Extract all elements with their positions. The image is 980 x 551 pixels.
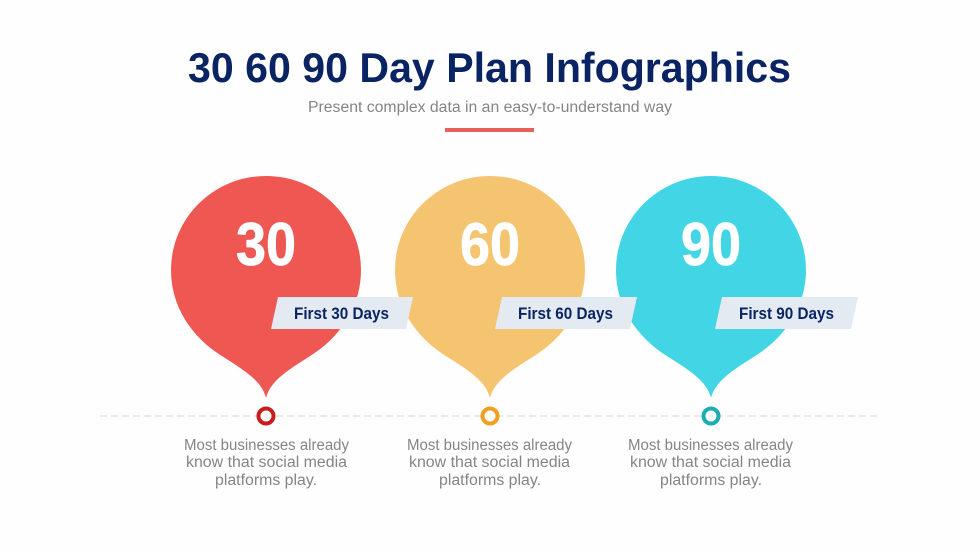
description: 30: know that social media bbox=[186, 454, 347, 471]
title underline bbox=[445, 128, 534, 132]
label: First 30 Days: First 30 Days bbox=[294, 304, 389, 323]
description: 30: platforms play. bbox=[215, 472, 317, 489]
number: 90: 90 bbox=[681, 211, 741, 278]
panel: 90 days bbox=[616, 176, 858, 489]
timeline marker: 60 bbox=[482, 408, 498, 424]
pin: 60 bbox=[395, 176, 585, 398]
timeline marker: 30 bbox=[258, 408, 274, 424]
label: First 30 Days bbox=[271, 297, 413, 329]
label: First 90 Days bbox=[715, 297, 858, 329]
description: 90: know that social media bbox=[630, 454, 791, 471]
timeline dashed line bbox=[100, 415, 880, 417]
number: 30: 30 bbox=[236, 211, 296, 278]
panel: 60 days bbox=[395, 176, 637, 489]
description: 90: platforms play. bbox=[660, 472, 762, 489]
number: 60: 60 bbox=[460, 211, 520, 278]
panel: 30 days bbox=[171, 176, 413, 489]
pin: 90 bbox=[616, 176, 806, 398]
label: First 90 Days: First 90 Days bbox=[739, 304, 834, 323]
description: 60: platforms play. bbox=[439, 472, 541, 489]
pin: 30 bbox=[171, 176, 361, 398]
description: 30: Most businesses already bbox=[184, 437, 349, 454]
description: 60: Most businesses already bbox=[407, 437, 572, 454]
timeline marker: 90 bbox=[704, 408, 718, 424]
label: First 60 Days: First 60 Days bbox=[518, 304, 613, 323]
label: First 60 Days bbox=[495, 297, 637, 329]
subtitle: Present complex data in an easy-to-understand way bbox=[308, 99, 672, 116]
description: 60: know that social media bbox=[409, 454, 570, 471]
title: 30 60 90 Day Plan Infographics bbox=[188, 44, 791, 91]
description: 90: Most businesses already bbox=[628, 437, 793, 454]
